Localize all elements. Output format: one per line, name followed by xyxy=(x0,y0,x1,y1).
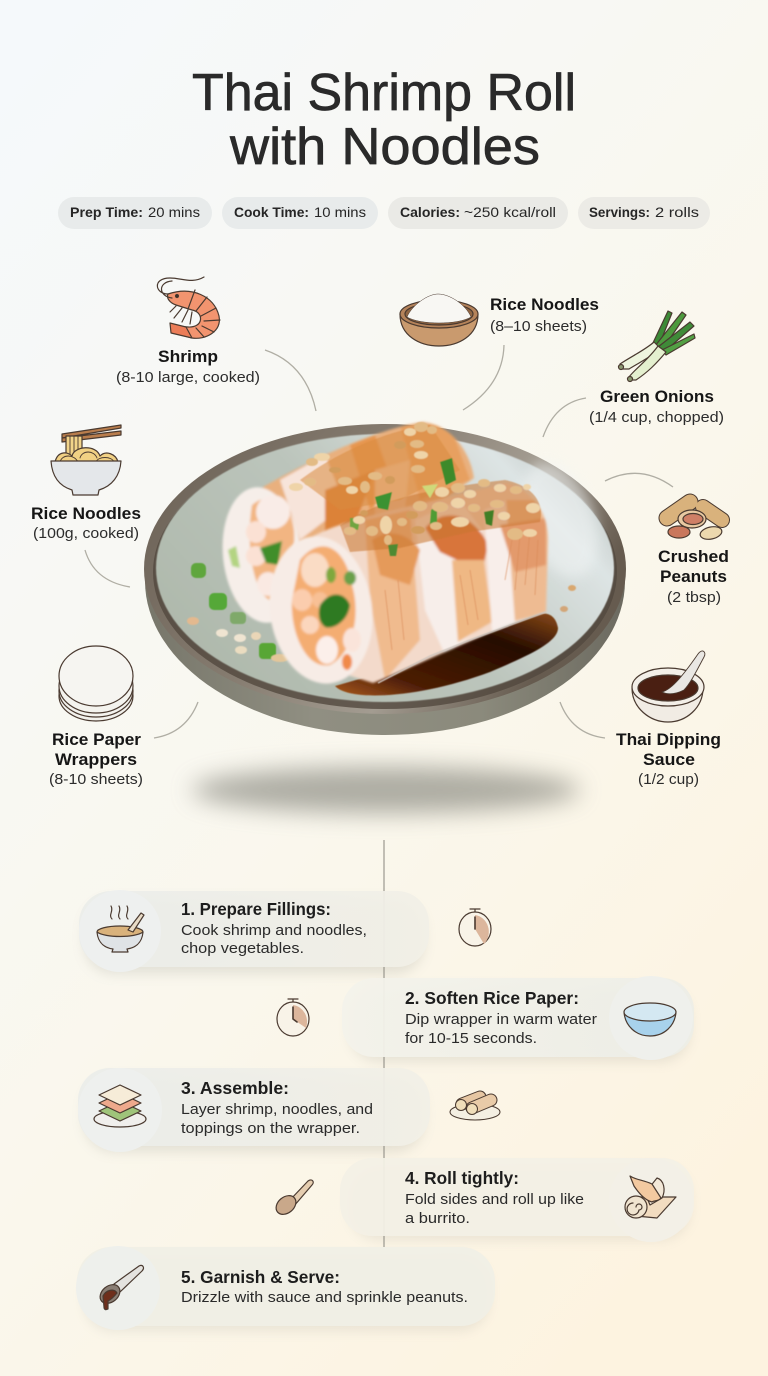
label xyxy=(616,730,721,788)
label: (8-10 sheets) xyxy=(49,771,143,788)
text: toppings on the wrapper. xyxy=(181,1120,360,1137)
dish photo: plate with shrimp rolls xyxy=(144,422,626,735)
icon: sauce spoon xyxy=(96,1265,143,1310)
text: Fold sides and roll up like xyxy=(405,1191,584,1208)
ingredient: shrimp xyxy=(116,277,260,386)
text xyxy=(405,1168,584,1227)
icon: layered wrapper xyxy=(94,1085,146,1127)
label: (1/4 cup, chopped) xyxy=(589,409,724,426)
ingredient: crushed peanuts xyxy=(658,502,729,606)
pill: calories xyxy=(388,197,568,229)
ingredient: rice noodles, cooked xyxy=(31,425,141,542)
title xyxy=(192,64,576,176)
label xyxy=(589,387,724,426)
label: Wrappers xyxy=(55,750,137,769)
text: 2. Soften Rice Paper: xyxy=(405,988,579,1008)
text xyxy=(181,1267,468,1306)
pill: prep time xyxy=(58,197,212,229)
icon: soup bowl xyxy=(97,906,144,952)
label: (2 tbsp) xyxy=(667,589,721,606)
timeline line xyxy=(383,840,385,1247)
icon: stopwatch 2 xyxy=(277,999,309,1036)
label: (1/2 cup) xyxy=(638,771,699,788)
pill: cook time: Cook Time: xyxy=(234,204,309,220)
text: Layer shrimp, noodles, and xyxy=(181,1101,373,1118)
pill: prep time: Prep Time: xyxy=(70,204,143,220)
stat pills xyxy=(58,197,710,229)
ingredient: rice noodles, sheets xyxy=(400,294,599,346)
label xyxy=(490,295,599,335)
icon: dipping bowl xyxy=(632,651,705,722)
icon: peanuts xyxy=(667,502,723,541)
label: Rice Paper xyxy=(52,730,141,749)
icon: wooden spoon xyxy=(272,1180,313,1218)
back roll xyxy=(216,422,474,627)
ingredient: rice paper wrappers xyxy=(49,646,143,788)
step 3 card xyxy=(78,1068,430,1152)
text: Cook shrimp and noodles, xyxy=(181,922,367,939)
icon: rice paper stack xyxy=(59,646,133,721)
icon: rolls on plate xyxy=(450,1097,500,1120)
text: 1. Prepare Fillings: xyxy=(181,899,331,919)
text: chop vegetables. xyxy=(181,940,304,957)
text: a burrito. xyxy=(405,1210,470,1227)
plate xyxy=(144,424,626,735)
label xyxy=(116,347,260,386)
crushed peanuts topping xyxy=(289,422,541,556)
step 5 card xyxy=(76,1246,495,1331)
front roll xyxy=(260,483,550,690)
label: Thai Dipping xyxy=(616,730,721,749)
label: Peanuts xyxy=(660,567,727,586)
scattered garnish xyxy=(187,563,576,662)
label: Green Onions xyxy=(600,387,714,406)
label: (8–10 sheets) xyxy=(490,318,587,335)
ingredient: green onions xyxy=(589,311,724,426)
icon: green onions xyxy=(618,311,695,382)
label xyxy=(31,504,141,542)
step 4 card xyxy=(340,1158,694,1242)
pill: cook time: 10 mins xyxy=(314,204,366,220)
roll edge highlight xyxy=(378,612,546,683)
pill: servings xyxy=(578,197,710,229)
label: Shrimp xyxy=(158,347,218,366)
label: Sauce xyxy=(643,750,695,769)
icon: hands rolling xyxy=(625,1176,676,1218)
icon: shrimp xyxy=(157,277,220,338)
text: for 10-15 seconds. xyxy=(405,1030,537,1047)
title: with Noodles xyxy=(229,118,540,176)
label xyxy=(49,730,143,788)
label xyxy=(658,547,729,606)
icon: bowl of rice xyxy=(400,294,478,346)
text: Dip wrapper in warm water xyxy=(405,1011,597,1028)
plate shadow xyxy=(192,767,580,813)
shredded wrapper texture xyxy=(385,530,538,650)
sauce pool xyxy=(335,614,558,695)
text: 3. Assemble: xyxy=(181,1078,289,1098)
step 2 card xyxy=(342,976,694,1062)
pill: prep time: 20 mins xyxy=(148,204,200,220)
text xyxy=(405,988,597,1047)
label: (100g, cooked) xyxy=(33,525,139,542)
label: Rice Noodles xyxy=(31,504,141,523)
pill: cook time xyxy=(222,197,378,229)
step 1 card xyxy=(79,890,429,974)
pill: calories: Calories: xyxy=(400,204,460,220)
text: 5. Garnish & Serve: xyxy=(181,1267,340,1287)
icon: stopwatch 1 xyxy=(459,909,491,946)
label: (8-10 large, cooked) xyxy=(116,369,260,386)
ingredient: thai dipping sauce xyxy=(616,651,721,788)
label: Crushed xyxy=(658,547,729,566)
text xyxy=(181,1078,373,1137)
pill: servings: Servings: xyxy=(589,204,650,220)
text: 4. Roll tightly: xyxy=(405,1168,519,1188)
label: Rice Noodles xyxy=(490,295,599,314)
text: Drizzle with sauce and sprinkle peanuts. xyxy=(181,1289,468,1306)
title: Thai Shrimp Roll xyxy=(192,64,576,122)
pill: servings: 2 rolls xyxy=(655,204,699,220)
icon: noodle bowl xyxy=(51,425,121,495)
text xyxy=(181,899,367,957)
icon: water bowl xyxy=(624,1003,676,1036)
pill: calories: ~250 kcal/roll xyxy=(464,204,556,220)
